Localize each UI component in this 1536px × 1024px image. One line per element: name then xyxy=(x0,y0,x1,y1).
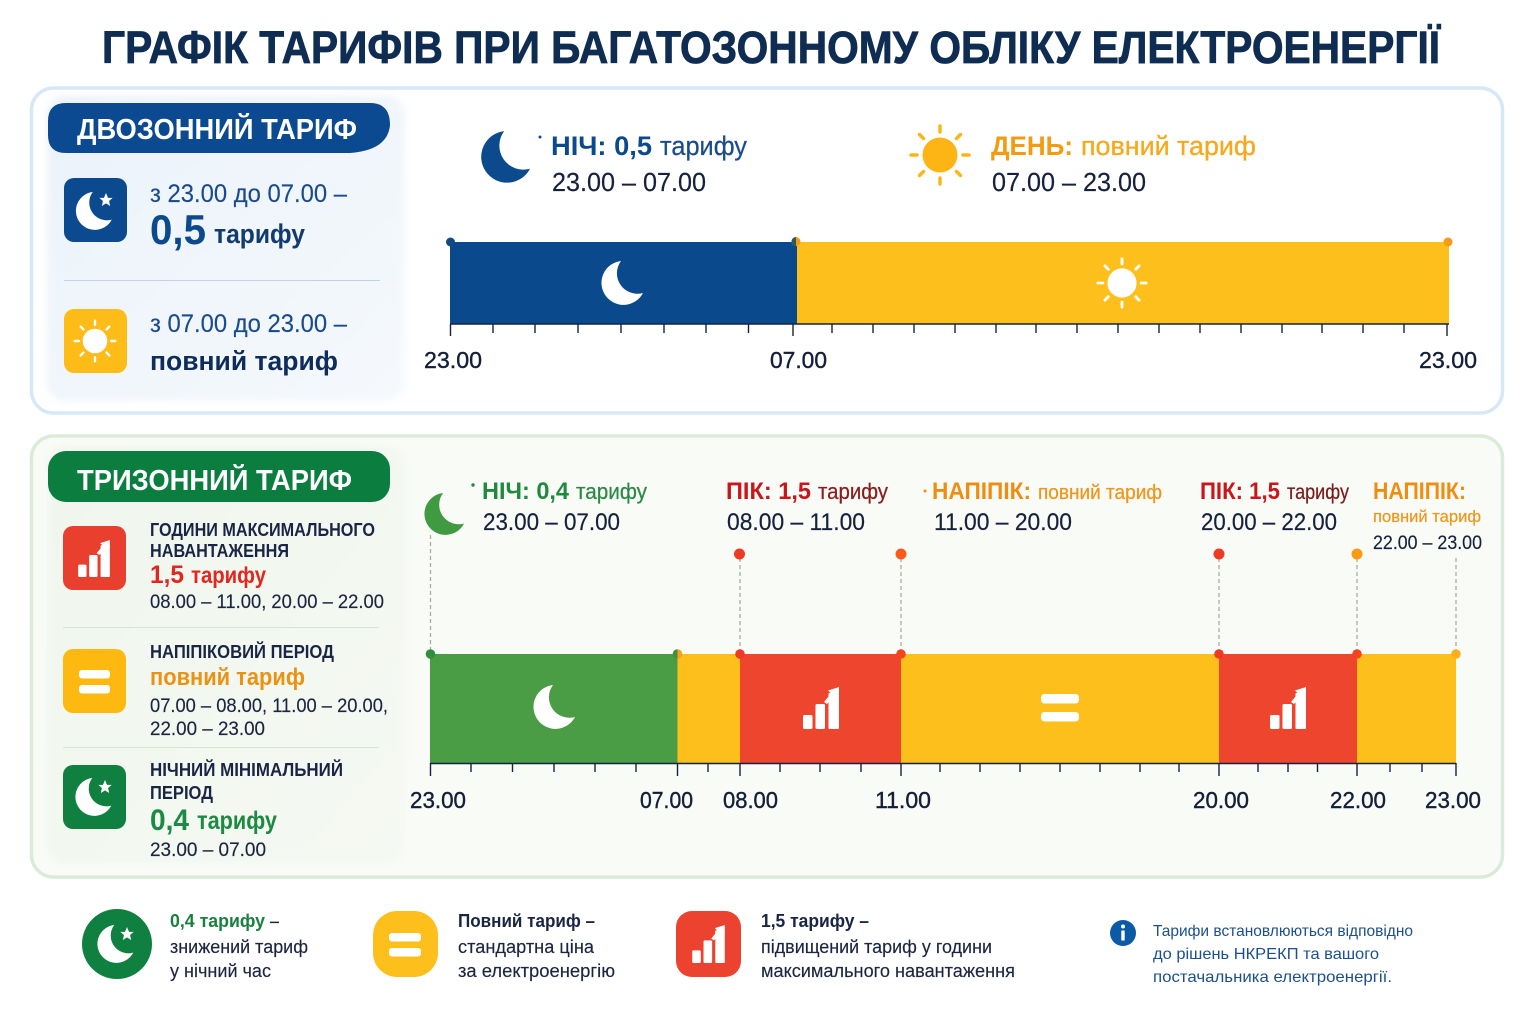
label: peak evening xyxy=(1200,478,1349,536)
legend: increased tariff: підвищений тариф у години xyxy=(761,937,992,957)
label: night: тарифу xyxy=(576,479,647,504)
axis labels: 23.00 xyxy=(1425,787,1481,813)
text: peak hours: тарифу xyxy=(191,562,266,588)
legend: reduced tariff xyxy=(82,909,308,981)
label: night: тарифу xyxy=(660,131,747,161)
label: peak evening: 20.00 – 22.00 xyxy=(1201,509,1337,536)
text: night minimum period: тарифу xyxy=(197,807,277,835)
legend: full tariff xyxy=(373,911,615,981)
label: day xyxy=(911,126,1256,197)
chart: two-zone timeline xyxy=(424,237,1477,373)
text: night minimum period: ПЕРІОД xyxy=(150,783,213,803)
icon: sun on bar xyxy=(1098,259,1146,307)
text: peak hours: ГОДИНИ МАКСИМАЛЬНОГО xyxy=(150,520,375,540)
label: night: НІЧ: 0,5 xyxy=(551,131,652,161)
note: regulator info: до рішень НКРЕКП та вашого xyxy=(1153,946,1379,963)
label: peak morning xyxy=(726,478,888,536)
label: mid-peak day xyxy=(924,478,1162,536)
label: peak evening: тарифу xyxy=(1287,481,1349,504)
label: night: 23.00 – 07.00 xyxy=(552,167,706,197)
icon: day tile xyxy=(64,309,127,373)
legend: full tariff: стандартна ціна xyxy=(458,937,595,957)
legend: increased tariff xyxy=(676,911,1015,981)
axis labels: 22.00 xyxy=(1330,787,1386,813)
label: mid-peak evening: повний тариф xyxy=(1373,507,1481,526)
icon: equals on bar xyxy=(1041,694,1079,722)
legend: reduced tariff: 0,4 тарифу xyxy=(170,911,265,931)
axis labels: 11.00 xyxy=(875,787,931,813)
label: mid-peak day: повний тариф xyxy=(1038,482,1162,504)
text: mid-peak period: 22.00 – 23.00 xyxy=(150,718,265,740)
label: mid-peak evening: 22.00 – 23.00 xyxy=(1373,533,1482,554)
heading: three-zone tariff xyxy=(48,451,390,502)
text: night rate: тарифу xyxy=(214,219,305,249)
icon: night tile xyxy=(64,178,127,242)
axis labels: 23.00 xyxy=(1419,347,1477,373)
text: peak hours xyxy=(150,520,384,613)
label: peak morning: 08.00 – 11.00 xyxy=(727,509,865,536)
label: night: НІЧ: 0,4 xyxy=(482,478,570,505)
label: day: ДЕНЬ: xyxy=(991,131,1073,161)
label: mid-peak day: 11.00 – 20.00 xyxy=(934,509,1072,536)
text: day rate xyxy=(150,310,347,376)
text: mid-peak period: повний тариф xyxy=(150,664,305,691)
icon: moon on bar xyxy=(601,261,643,305)
note: regulator info xyxy=(1110,920,1413,986)
axis labels xyxy=(410,787,1481,813)
text: mid-peak period: 07.00 – 08.00, 11.00 – 20.00, xyxy=(150,695,388,717)
label: peak morning: тарифу xyxy=(818,479,888,504)
text: mid-peak period xyxy=(150,641,388,740)
label: peak evening: ПІК: 1,5 xyxy=(1200,478,1280,505)
panel: two-zone tariff xyxy=(32,88,1502,413)
panel: three-zone tariff xyxy=(32,436,1502,877)
label: night: 23.00 – 07.00 xyxy=(483,509,620,536)
text: peak hours: 08.00 – 11.00, 20.00 – 22.00 xyxy=(150,591,384,613)
text: peak hours: НАВАНТАЖЕННЯ xyxy=(150,541,289,561)
text: night minimum period xyxy=(150,759,343,861)
heading: three-zone tariff: ТРИЗОННИЙ ТАРИФ xyxy=(77,463,352,497)
axis labels: 08.00 xyxy=(723,787,778,813)
axis labels: 20.00 xyxy=(1193,787,1249,813)
axis labels: 23.00 xyxy=(424,347,482,373)
icon: night tile green xyxy=(63,765,126,829)
legend: full tariff: Повний тариф – xyxy=(458,911,595,931)
legend: increased tariff: максимального навантаження xyxy=(761,961,1015,981)
legend: reduced tariff: знижений тариф xyxy=(170,937,308,957)
chart: three-zone timeline xyxy=(410,535,1481,813)
label: night xyxy=(424,478,647,536)
note: regulator info: постачальника електроенергії. xyxy=(1153,969,1392,986)
label: mid-peak day: НАПІПІК: xyxy=(932,478,1031,505)
text: mid-peak period: НАПІПІКОВИЙ ПЕРІОД xyxy=(150,641,334,662)
text: night minimum period: НІЧНИЙ МІНІМАЛЬНИЙ xyxy=(150,759,343,780)
icon: peak tile xyxy=(63,526,126,590)
label: peak morning: ПІК: 1,5 xyxy=(726,478,811,505)
label: mid-peak evening: НАПІПІК: xyxy=(1373,478,1466,505)
icon: bars on second peak xyxy=(1270,687,1306,729)
legend: increased tariff: 1,5 тарифу – xyxy=(761,911,869,931)
axis labels: 23.00 xyxy=(410,787,466,813)
icon: mid-peak tile xyxy=(63,649,126,713)
heading: two-zone tariff xyxy=(48,103,390,153)
legend: full tariff: за електроенергію xyxy=(458,961,615,981)
note: regulator info: Тарифи встановлюються відповідно xyxy=(1153,923,1413,940)
icon: moon on bar xyxy=(533,685,575,729)
text: day rate: повний тариф xyxy=(150,346,338,376)
text: peak hours: 1,5 xyxy=(150,561,184,589)
axis labels: 07.00 xyxy=(640,787,693,813)
heading: two-zone tariff: ДВОЗОННИЙ ТАРИФ xyxy=(77,112,357,146)
legend: reduced tariff: у нічний час xyxy=(170,961,271,981)
axis labels xyxy=(424,347,1477,373)
text: day rate: з 07.00 до 23.00 – xyxy=(150,310,347,338)
text: night minimum period: 23.00 – 07.00 xyxy=(150,839,266,861)
label: day: 07.00 – 23.00 xyxy=(992,167,1146,197)
text: night rate: 0,5 xyxy=(150,206,206,253)
icon: bars on first peak xyxy=(803,687,839,729)
text: night rate xyxy=(150,180,347,253)
label: mid-peak evening xyxy=(1373,478,1482,554)
text: night rate: з 23.00 до 07.00 – xyxy=(150,180,347,208)
legend: reduced tariff: – xyxy=(270,911,279,931)
axis labels: 07.00 xyxy=(770,347,827,373)
text: night minimum period: 0,4 xyxy=(150,804,189,837)
label: day: повний тариф xyxy=(1081,131,1256,161)
label: night xyxy=(481,131,747,197)
